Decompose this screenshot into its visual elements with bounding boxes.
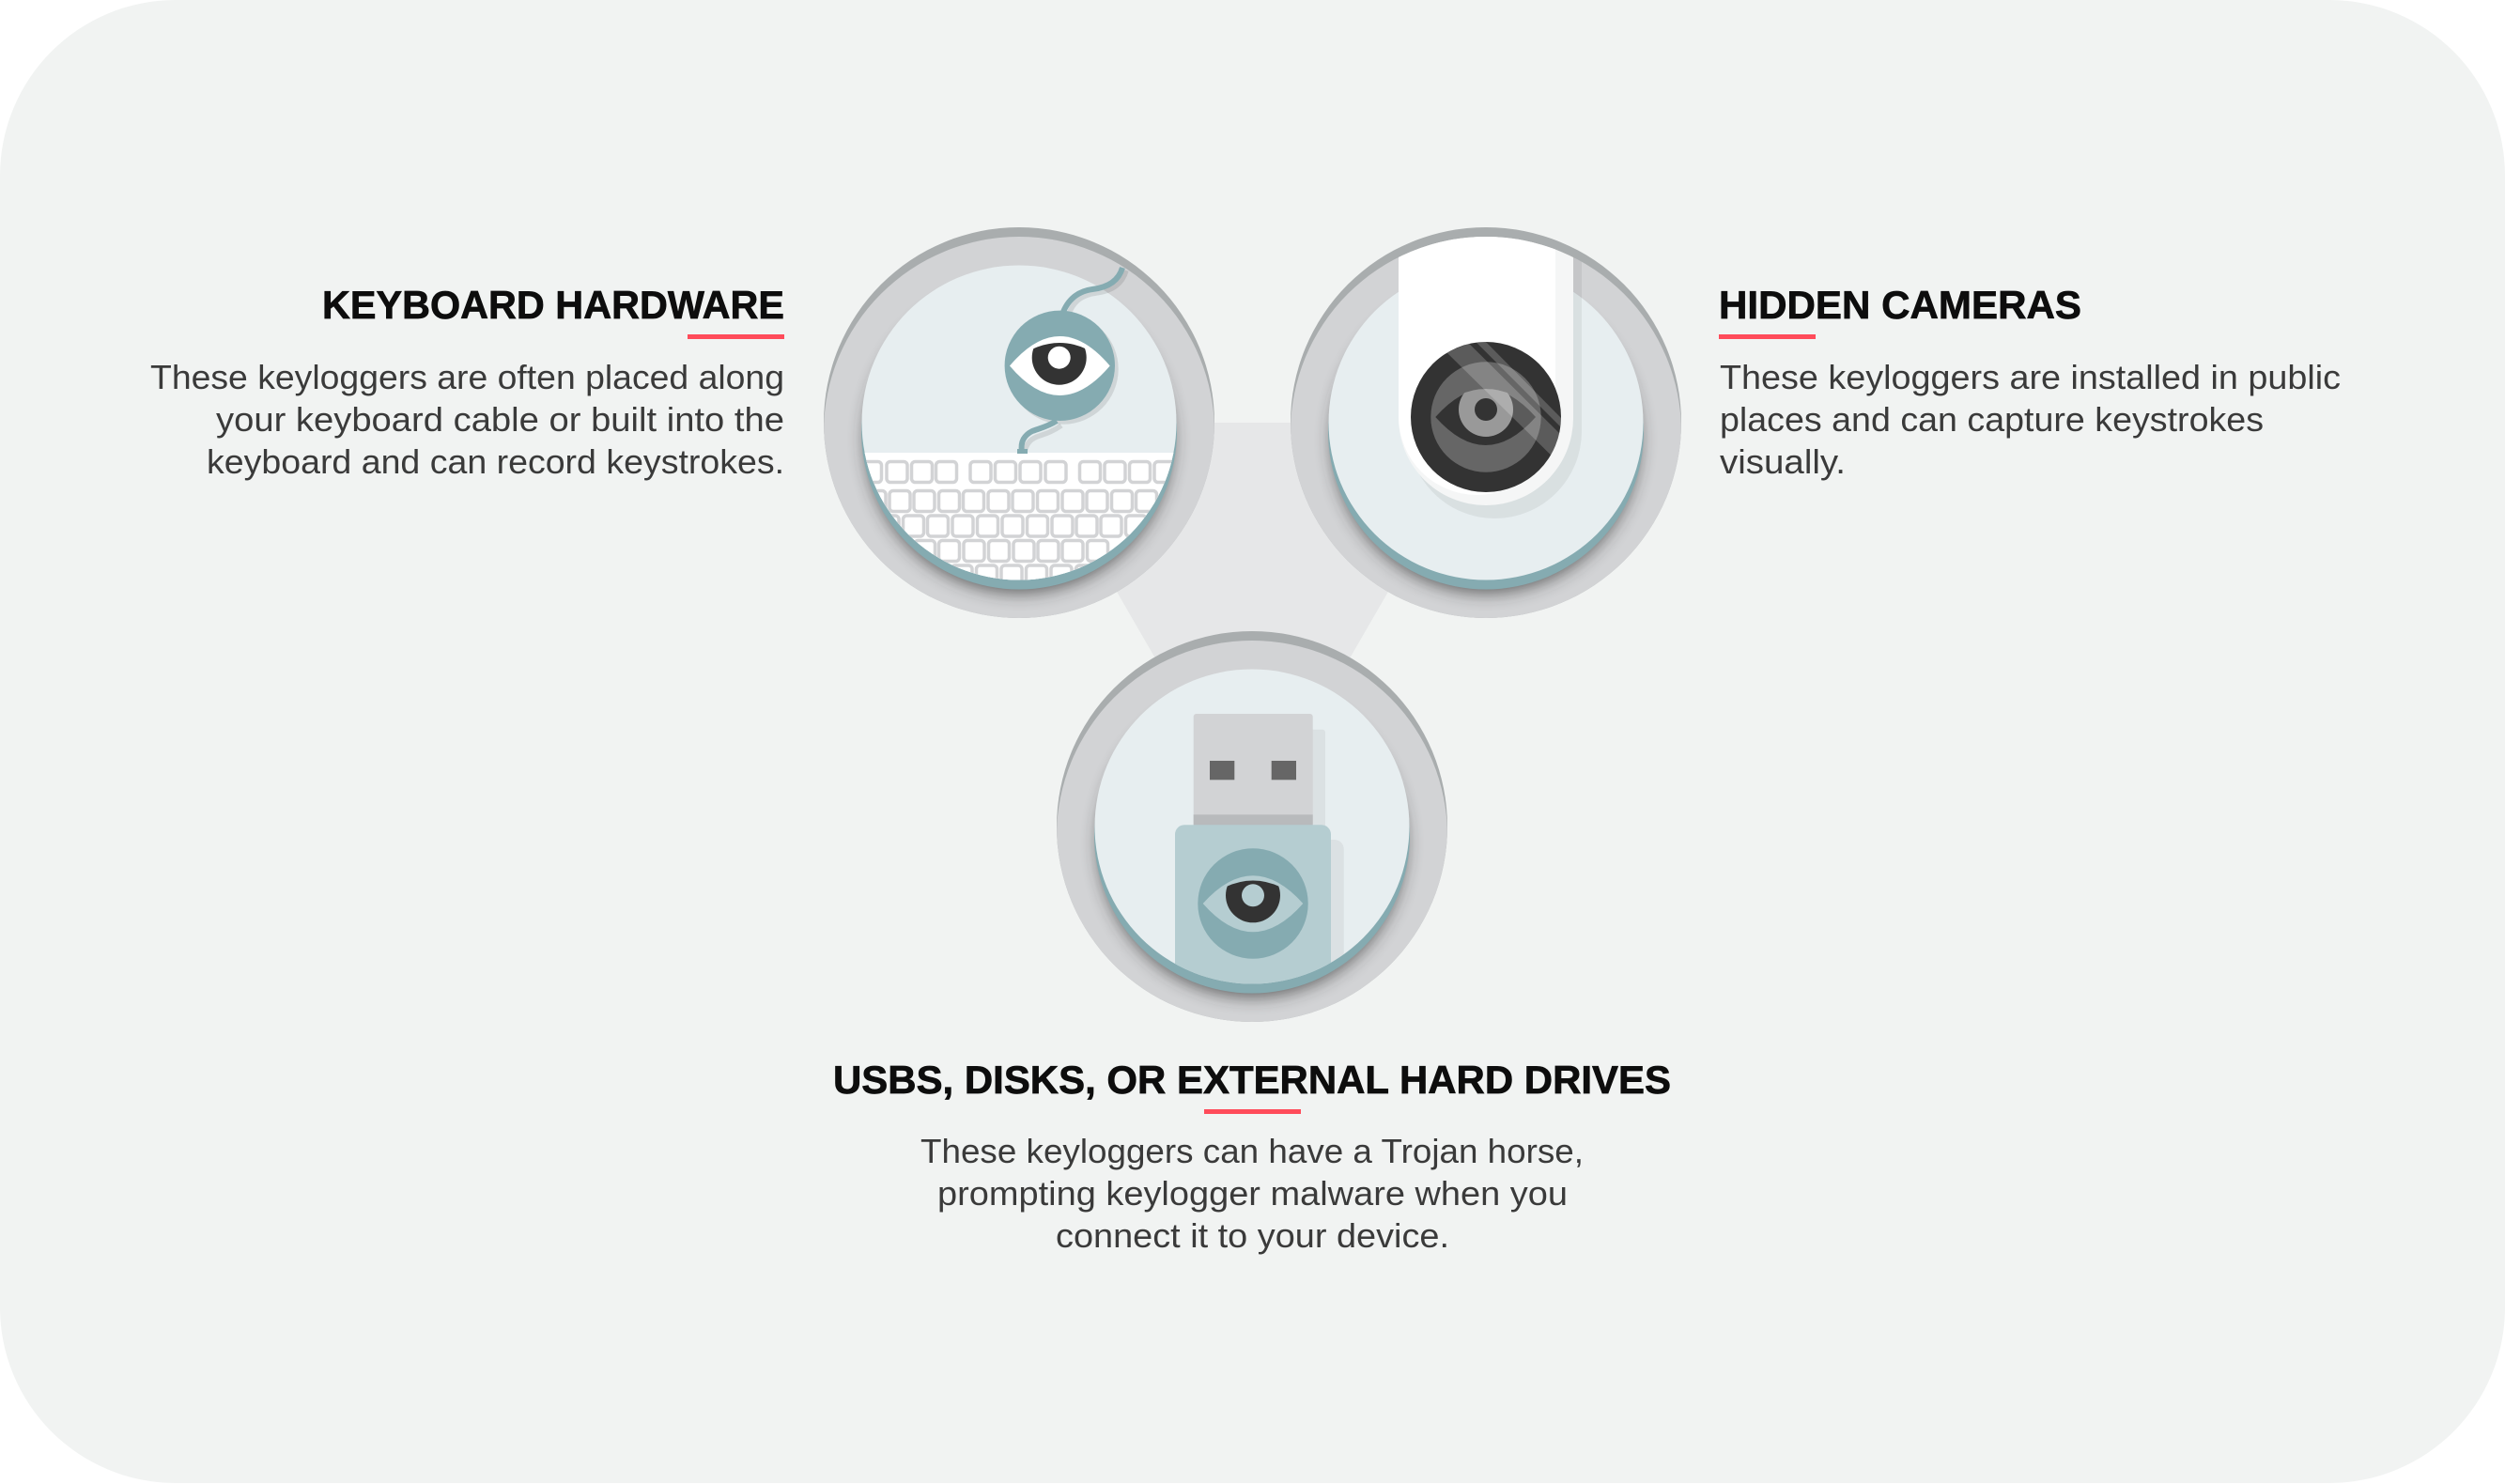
- icon: camera housing: [1399, 216, 1582, 518]
- text block: USBs, disks, or external hard drives: [833, 1058, 1671, 1255]
- text block: keyboard hardware: [150, 283, 784, 481]
- body text: [1720, 358, 2341, 481]
- heading: KEYBOARD HARDWARE: [322, 283, 784, 327]
- accent underline: [1204, 1109, 1301, 1114]
- connecting triangle: [1019, 423, 1486, 827]
- body text: keyboard and can record keystrokes.: [207, 442, 784, 481]
- body text: [920, 1132, 1584, 1255]
- text block: hidden cameras: [1719, 283, 2341, 481]
- body text: These keyloggers can have a Trojan horse,: [920, 1132, 1584, 1170]
- body text: [150, 358, 784, 481]
- panel: keyboard hardware badge: [824, 227, 1214, 627]
- icon: USB drive: [1175, 714, 1344, 999]
- body text: These keyloggers are installed in public: [1720, 358, 2341, 396]
- icon: camera lens with eye: [1411, 340, 1563, 492]
- body text: prompting keylogger malware when you: [937, 1174, 1568, 1213]
- body text: places and can capture keystrokes: [1720, 400, 2264, 439]
- icon: eye sensor on cable: [1005, 268, 1122, 454]
- body text: connect it to your device.: [1056, 1216, 1449, 1255]
- accent underline: [1719, 334, 1816, 339]
- panel: hidden cameras badge: [1291, 216, 1681, 627]
- body text: visually.: [1720, 442, 1846, 481]
- heading: USBS, DISKS, OR EXTERNAL HARD DRIVES: [833, 1058, 1671, 1102]
- body text: your keyboard cable or built into the: [216, 400, 784, 439]
- panel: USB drive badge: [1057, 631, 1447, 1031]
- icon: keyboard: [864, 453, 1174, 580]
- body text: These keyloggers are often placed along: [150, 358, 784, 396]
- heading: HIDDEN CAMERAS: [1719, 283, 2081, 327]
- accent underline: [688, 334, 784, 339]
- icon: cable shadow: [1025, 271, 1126, 453]
